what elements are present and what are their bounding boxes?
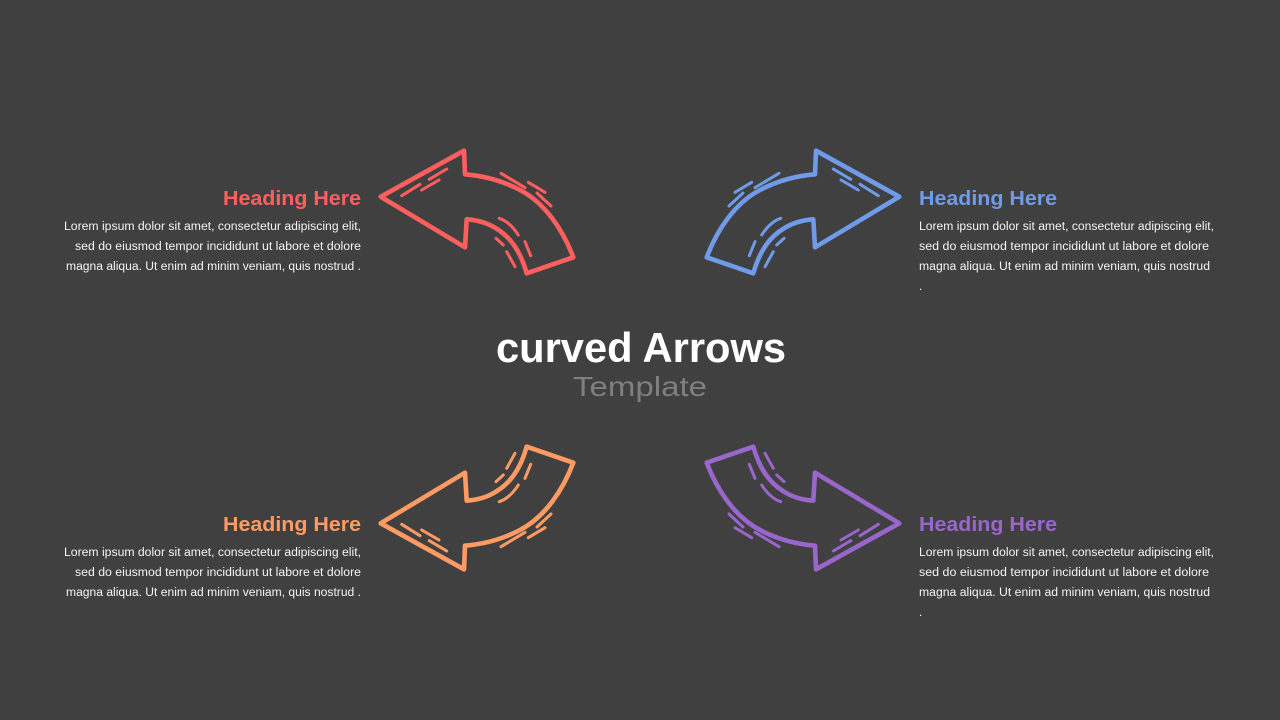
icon: orange curved arrow pointing left — [381, 447, 573, 569]
text block: top right — [919, 221, 1214, 293]
text block: bottom left: sed do eiusmod tempor incididunt ut labore et dolore — [75, 567, 361, 579]
title — [496, 324, 786, 402]
icon: purple curved arrow pointing right — [707, 447, 899, 569]
text block: top left — [64, 221, 361, 273]
text block: bottom left: magna aliqua. Ut enim ad minim veniam, quis nostrud . — [66, 587, 361, 599]
text block: bottom left — [64, 547, 361, 599]
text block: top left: magna aliqua. Ut enim ad minim veniam, quis nostrud . — [66, 261, 361, 273]
text block: top left: sed do eiusmod tempor incididunt ut labore et dolore — [75, 241, 361, 253]
text block: top right: sed do eiusmod tempor incididunt ut labore et dolore — [919, 241, 1209, 253]
panel: top left — [64, 151, 573, 273]
text block: bottom right: magna aliqua. Ut enim ad minim veniam, quis nostrud — [919, 587, 1210, 599]
heading: purple: Heading Here — [919, 514, 1057, 536]
panel: top right — [707, 151, 1214, 293]
icon: red curved arrow pointing left — [381, 151, 573, 273]
heading: red: Heading Here — [223, 188, 361, 210]
text block: bottom right: sed do eiusmod tempor incididunt ut labore et dolore — [919, 567, 1209, 579]
heading: blue: Heading Here — [919, 188, 1057, 210]
panel: bottom right — [707, 447, 1214, 619]
subtitle: Template — [573, 371, 707, 402]
text block: top right: . — [919, 281, 922, 293]
icon: blue curved arrow pointing right — [707, 151, 899, 273]
text block: top right: magna aliqua. Ut enim ad minim veniam, quis nostrud — [919, 261, 1210, 273]
heading: orange: Heading Here — [223, 514, 361, 536]
text block: top left: Lorem ipsum dolor sit amet, consectetur adipiscing elit, — [64, 221, 361, 233]
text block: bottom right: Lorem ipsum dolor sit amet, consectetur adipiscing elit, — [919, 547, 1214, 559]
panel: bottom left — [64, 447, 573, 599]
title: curved Arrows — [496, 324, 786, 371]
text block: top right: Lorem ipsum dolor sit amet, consectetur adipiscing elit, — [919, 221, 1214, 233]
text block: bottom right: . — [919, 607, 922, 619]
text block: bottom left: Lorem ipsum dolor sit amet, consectetur adipiscing elit, — [64, 547, 361, 559]
text block: bottom right — [919, 547, 1214, 619]
